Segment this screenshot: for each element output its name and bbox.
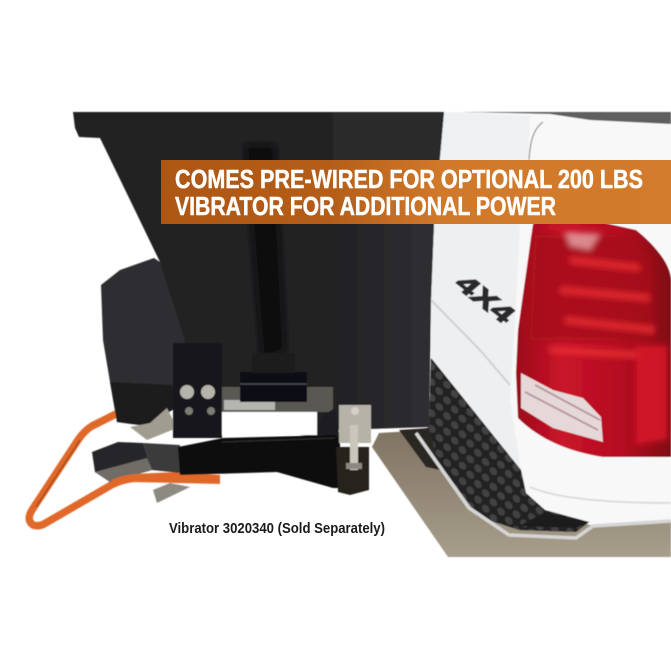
badge: 4X4: 4X4 bbox=[448, 269, 522, 329]
chute bbox=[92, 408, 220, 503]
window seal bbox=[460, 112, 671, 124]
hopper bbox=[73, 112, 444, 440]
orange handle bbox=[29, 412, 220, 526]
running board step bbox=[399, 358, 671, 538]
handle front bbox=[113, 478, 220, 484]
photo: spreader on truck bbox=[29, 112, 671, 557]
banner heading: VIBRATOR FOR ADDITIONAL POWER bbox=[175, 191, 556, 221]
vibrator mount bbox=[222, 353, 340, 440]
banner heading bbox=[175, 164, 643, 221]
caption: Vibrator 3020340 (Sold Separately) bbox=[169, 520, 385, 537]
ground strip bbox=[372, 430, 671, 557]
orange banner bbox=[161, 160, 671, 224]
tail light bbox=[516, 212, 671, 457]
truck body bbox=[431, 112, 671, 524]
frame bracket bbox=[173, 343, 340, 488]
latch bbox=[336, 405, 371, 495]
reverse lens bbox=[521, 373, 603, 442]
